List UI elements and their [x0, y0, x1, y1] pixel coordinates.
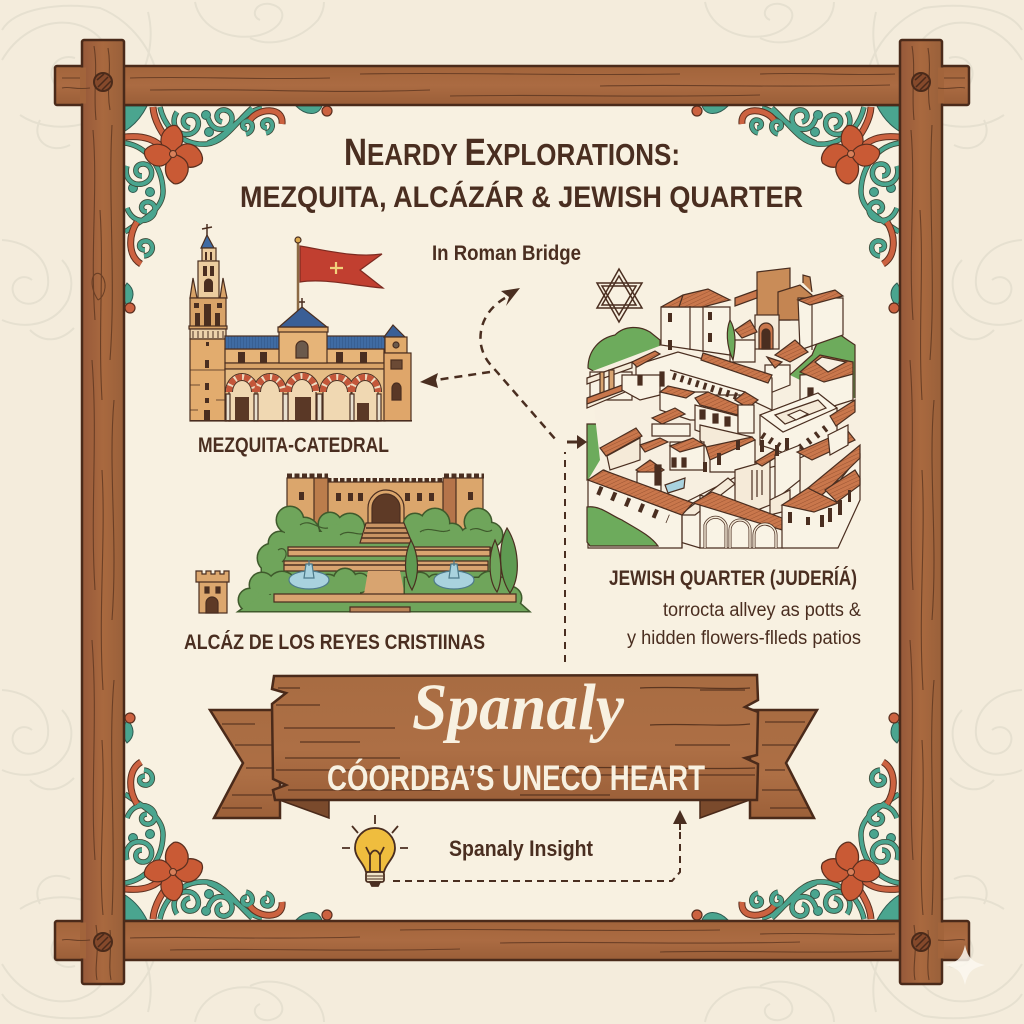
upper long range	[587, 351, 772, 410]
watermark sparkle	[945, 945, 985, 985]
text: Jewish Quarter description: y hidden flowers-flleds patios	[627, 628, 861, 649]
illustration: Alcazar	[239, 476, 528, 612]
arrowhead: Roman Bridge	[501, 288, 520, 306]
arrow: to Mezquita	[420, 372, 490, 388]
bell tower	[189, 224, 227, 421]
greenery	[587, 325, 855, 480]
castle	[287, 476, 484, 540]
inner parchment panel	[124, 105, 900, 921]
label: In Roman Bridge: In Roman Bridge	[432, 242, 581, 265]
flag	[295, 237, 383, 312]
label: Spanaly Insight: Spanaly Insight	[449, 836, 594, 861]
small details	[703, 438, 789, 472]
banner: ribbon right	[750, 710, 817, 818]
title: NEARDY EXPLORATIONS:	[344, 132, 680, 174]
arrow: insight to banner	[393, 810, 687, 881]
label: Alcazar: ALCÁZ DE LOS REYES CRISTIINAS	[184, 631, 485, 654]
brown keep	[735, 268, 815, 320]
gardens	[239, 507, 528, 612]
arrow: to Roman Bridge	[480, 298, 556, 440]
icon: star of David	[597, 269, 642, 322]
south-east towers	[782, 400, 860, 548]
label: Mezquita-Catedral: MEZQUITA-CATEDRAL	[198, 434, 389, 457]
gate tower	[727, 315, 808, 395]
base mass	[588, 345, 860, 548]
frame: bottom beam	[55, 921, 969, 960]
banner: ribbon folds	[274, 798, 755, 818]
banner subtitle: CÓORDBA’S UNECO HEART	[327, 758, 705, 798]
lower courtyard	[600, 445, 800, 548]
horseshoe arches	[226, 373, 381, 421]
right house	[800, 355, 853, 412]
arrow: to Jewish Quarter	[565, 435, 587, 662]
bolts	[94, 73, 930, 951]
banner: ribbon left	[210, 710, 280, 818]
ornament: top right	[692, 106, 901, 313]
banner title: Spanaly	[412, 671, 625, 744]
ornament: top left	[123, 106, 332, 313]
right white tower	[798, 290, 843, 350]
main hall	[225, 298, 386, 421]
text: Jewish Quarter description: torrocta allvey as potts &	[663, 600, 861, 621]
central houses	[600, 386, 758, 472]
title: MEZQUITA, ALCÁZÁR & JEWISH QUARTER	[240, 180, 803, 214]
long bottom-left range	[587, 470, 693, 548]
illustration: Mezquita-Catedral	[189, 224, 412, 422]
courtyard building	[760, 393, 837, 458]
right tower	[384, 325, 411, 421]
icon: small watchtower	[196, 571, 229, 613]
frame: right post	[900, 40, 942, 984]
large white tower	[661, 289, 730, 355]
fountain left	[289, 560, 329, 589]
banner: wooden plank	[272, 675, 758, 800]
fountain right	[434, 560, 474, 589]
icon: light bulb	[342, 815, 408, 886]
text: Jewish Quarter description	[627, 600, 861, 649]
label: Jewish Quarter: JEWISH QUARTER (JUDERÍÁ)	[609, 567, 857, 590]
ornament: bottom right	[692, 713, 901, 920]
ornament: bottom left	[123, 713, 332, 920]
illustration: Jewish Quarter	[587, 268, 860, 548]
frame: left post	[82, 40, 124, 984]
corner ornaments	[123, 106, 901, 920]
title	[240, 132, 803, 214]
frame: top beam	[55, 66, 969, 105]
banner: plank grain	[276, 687, 755, 795]
arcade and south range	[693, 492, 783, 548]
